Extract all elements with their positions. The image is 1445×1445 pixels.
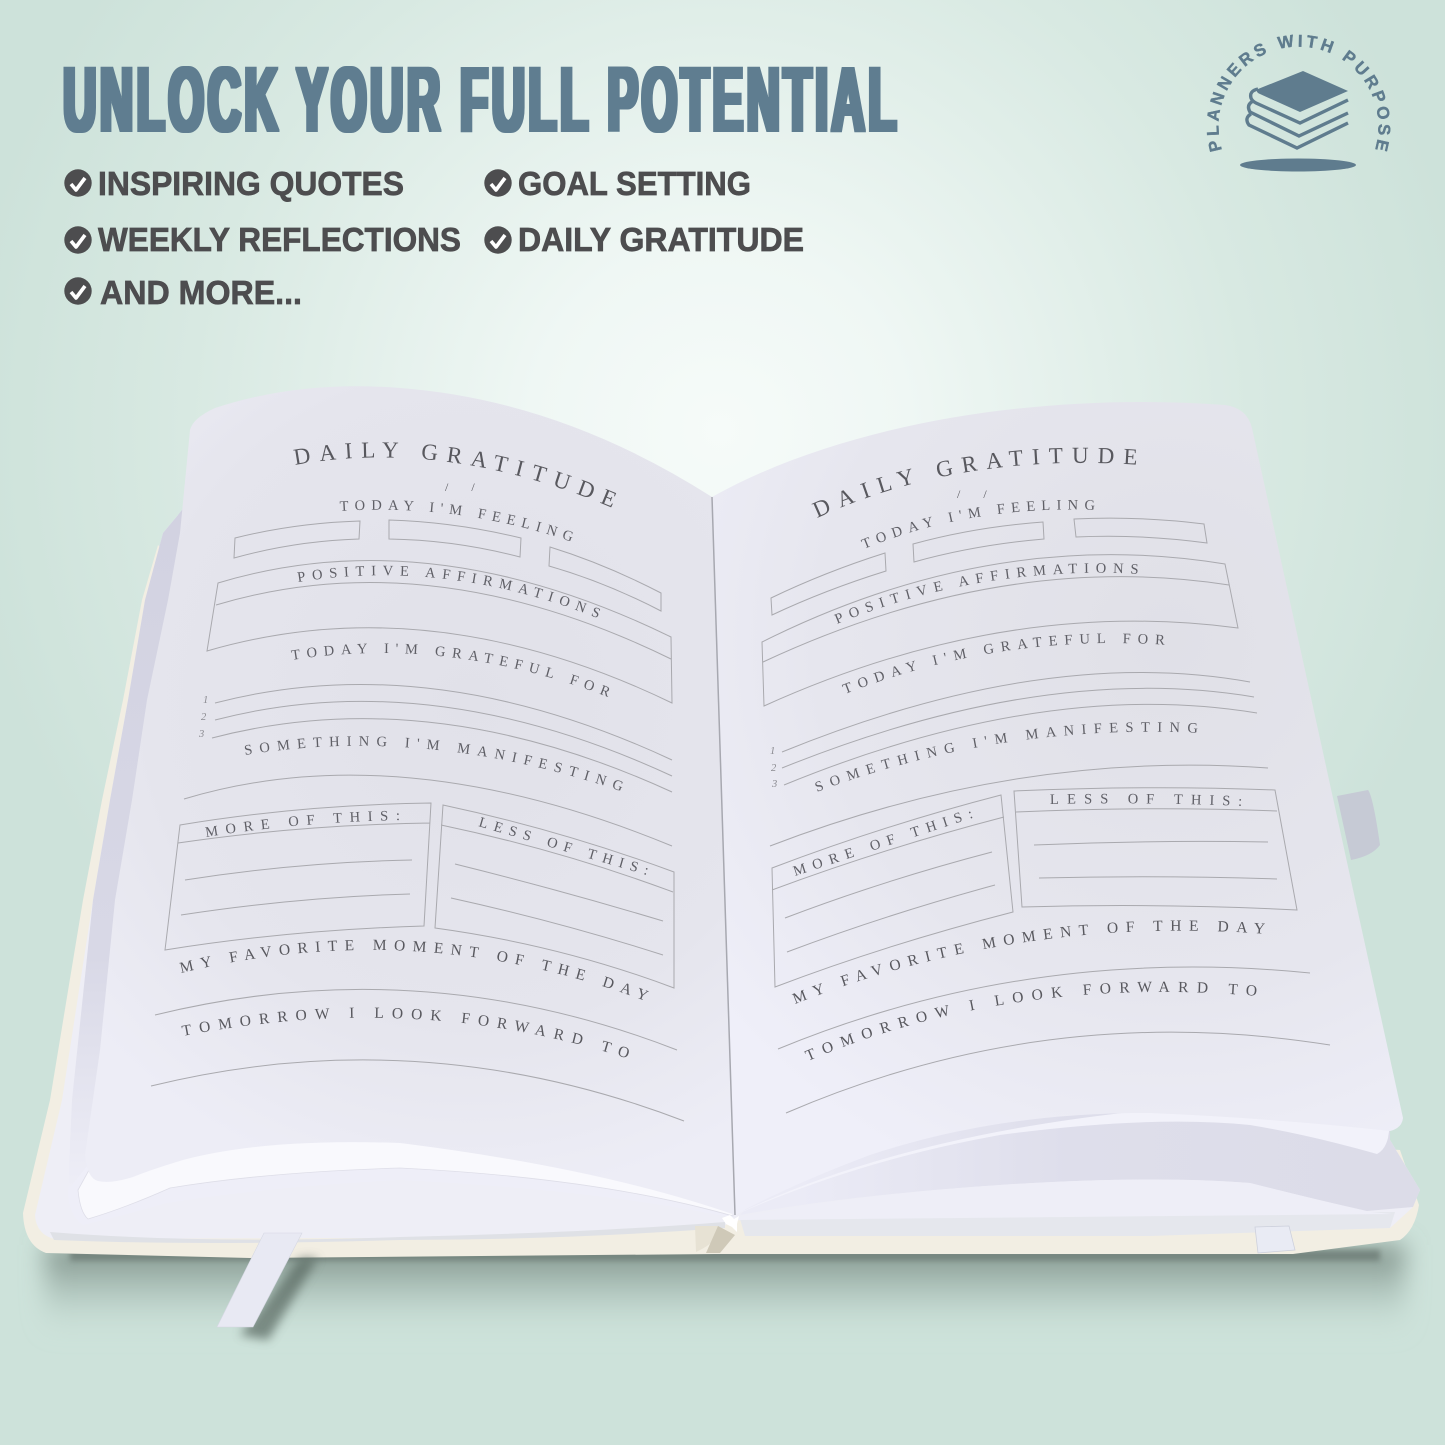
right less box: LESS OF THIS: xyxy=(1050,794,1242,806)
right grateful: TODAY I'M GRATEFUL FOR xyxy=(842,634,1164,694)
left affirmations xyxy=(206,560,672,704)
ribbon bookmark xyxy=(217,1233,302,1327)
right grateful: 2 xyxy=(771,763,777,774)
left grateful: TODAY I'M GRATEFUL FOR xyxy=(290,644,610,697)
open notebook xyxy=(23,500,1420,1258)
cream cover xyxy=(23,545,1419,1258)
right date: / / xyxy=(957,487,997,501)
right lower page wedge xyxy=(740,1179,1392,1220)
item: goal setting: GOAL SETTING xyxy=(518,166,751,203)
right block edge xyxy=(740,1212,1395,1236)
left lifted sheet 1 xyxy=(68,1120,733,1225)
icon: shadow ellipse xyxy=(1240,158,1356,172)
logo text: PLANNERS WITH PURPOSE xyxy=(1206,34,1390,152)
right feeling: TODAY I'M FEELING xyxy=(860,500,1094,548)
left block edge xyxy=(50,1222,725,1243)
right heading: DAILY GRATITUDE xyxy=(812,448,1136,518)
item: and more: AND MORE... xyxy=(100,275,302,312)
right lavender sheet xyxy=(740,1100,1420,1215)
item: inspiring quotes: INSPIRING QUOTES xyxy=(98,166,404,203)
left manifesting: SOMETHING I'M MANIFESTING xyxy=(244,736,623,790)
left grateful: 3 xyxy=(198,729,204,740)
title: UNLOCK YOUR FULL POTENTIAL xyxy=(63,50,896,151)
right feeling xyxy=(770,500,1208,616)
left grateful: 1 xyxy=(203,695,208,706)
right grateful xyxy=(770,634,1257,790)
left lifted sheet 2 xyxy=(78,1110,733,1219)
left page sheet xyxy=(85,386,735,1215)
left date: / / xyxy=(445,480,485,494)
left more box xyxy=(164,802,432,950)
elastic pen loop xyxy=(1337,790,1380,860)
right lifted sheet xyxy=(735,1110,1390,1215)
right manifesting: SOMETHING I'M MANIFESTING xyxy=(815,722,1198,792)
page block base xyxy=(35,515,1420,1239)
spine line xyxy=(712,497,735,1215)
left feeling xyxy=(234,500,662,612)
right more box: MORE OF THIS: xyxy=(792,812,972,876)
contact shadow xyxy=(70,1250,1380,1261)
left tomorrow xyxy=(150,1008,684,1122)
text curves xyxy=(181,457,1300,1071)
elastic band closure xyxy=(1255,1226,1295,1253)
left less box xyxy=(434,804,674,989)
left grateful: 2 xyxy=(201,712,207,723)
right grateful: 3 xyxy=(771,779,777,790)
right manifesting xyxy=(770,722,1268,846)
left favorite moment: MY FAVORITE MOMENT OF THE DAY xyxy=(179,940,649,1000)
right grateful: 1 xyxy=(770,746,775,757)
left feeling: TODAY I'M FEELING xyxy=(340,500,573,541)
cover fold xyxy=(695,1226,719,1252)
icon: stacked books xyxy=(1247,71,1348,148)
left favorite moment xyxy=(154,940,678,1050)
left more box: MORE OF THIS: xyxy=(205,810,399,837)
right affirmations xyxy=(762,554,1238,707)
left affirmations: POSITIVE AFFIRMATIONS xyxy=(297,566,600,618)
right more box xyxy=(772,794,1014,988)
item: weekly reflections: WEEKLY REFLECTIONS xyxy=(98,222,461,259)
spine thread xyxy=(722,1215,739,1232)
left tomorrow: TOMORROW I LOOK FORWARD TO xyxy=(181,1008,629,1058)
right favorite moment: MY FAVORITE MOMENT OF THE DAY xyxy=(792,920,1265,1004)
ribbon shadow xyxy=(240,1258,318,1340)
left manifesting xyxy=(184,736,672,846)
book shadow xyxy=(45,1245,1405,1335)
left lavender page edge xyxy=(68,500,190,1190)
right less box xyxy=(1014,787,1298,910)
left page xyxy=(88,386,734,1214)
right affirmations: POSITIVE AFFIRMATIONS xyxy=(834,563,1138,624)
right tomorrow: TOMORROW I LOOK FORWARD TO xyxy=(804,982,1256,1060)
feature checklist xyxy=(64,166,804,312)
left grateful xyxy=(198,644,672,792)
right page sheet xyxy=(712,402,1403,1215)
right favorite moment xyxy=(778,920,1310,1050)
left heading: DAILY GRATITUDE xyxy=(293,442,616,508)
item: daily gratitude: DAILY GRATITUDE xyxy=(518,222,804,259)
logo: planners with purpose xyxy=(1206,34,1390,172)
right page xyxy=(711,402,1403,1215)
left less box: LESS OF THIS: xyxy=(478,817,648,875)
right tomorrow xyxy=(786,982,1330,1114)
